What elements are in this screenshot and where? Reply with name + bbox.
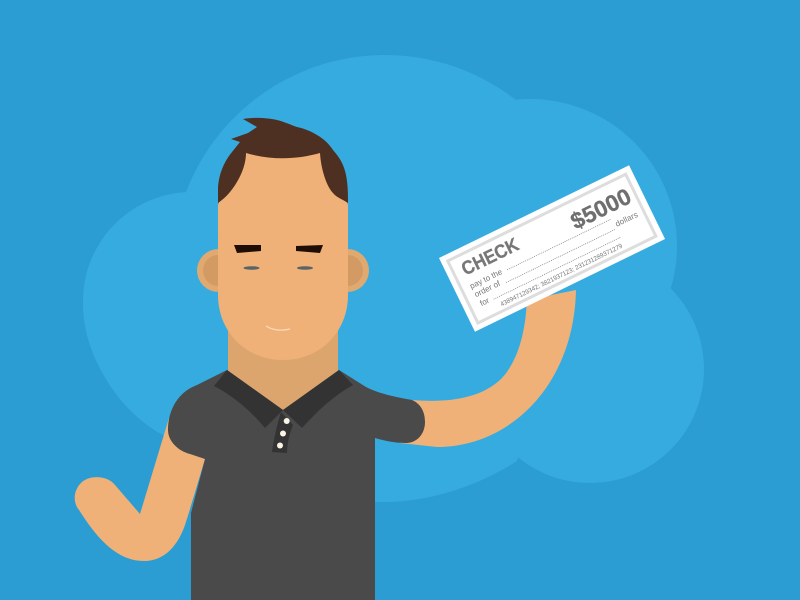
check (439, 165, 665, 332)
right arm holding check (400, 290, 576, 447)
eyes (244, 266, 313, 270)
payee lines (468, 203, 649, 317)
payee lines: order of (473, 279, 502, 299)
shirt (168, 370, 425, 600)
payee lines: for (478, 296, 491, 308)
neck (228, 320, 338, 415)
hair (218, 118, 348, 203)
cloud background (83, 55, 704, 502)
ears (197, 249, 369, 292)
smile (266, 326, 290, 330)
payee lines: dollars (614, 210, 639, 229)
left arm (75, 418, 205, 561)
dotted lines (485, 219, 620, 299)
face (218, 150, 348, 360)
check label: CHECK (458, 234, 523, 280)
payee lines: pay to the (468, 267, 504, 291)
amount: $5000 (566, 183, 635, 234)
collar (214, 370, 353, 428)
placket with buttons (272, 412, 293, 453)
eyebrows (234, 245, 323, 253)
man (75, 118, 576, 600)
payee lines: 438947129342; 3821937123; 231231289371279 (499, 243, 624, 308)
